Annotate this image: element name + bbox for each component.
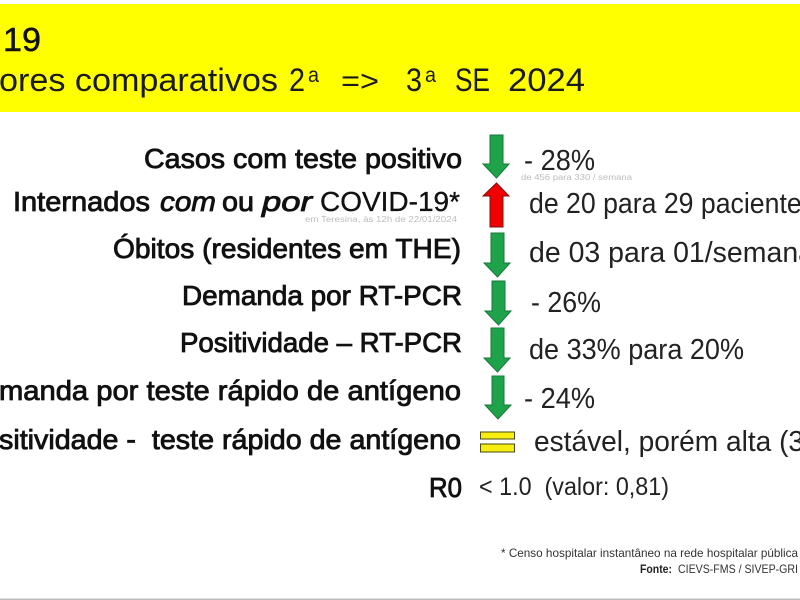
row 8: R0: R0	[429, 472, 462, 503]
row 4: demanda RT-PCR	[182, 280, 601, 325]
row 6: demanda teste rapido	[0, 375, 595, 419]
footnote: * Censo hospitalar instantâneo na rede hospitalar pública	[501, 546, 798, 560]
row 8: R0: < 1.0 (valor: 0,81)	[479, 473, 669, 501]
title: COVID-19: 19	[3, 21, 41, 58]
row 2: internados: por	[261, 186, 314, 217]
subtitle: =>	[341, 65, 379, 98]
subtitle: a	[308, 64, 319, 87]
row 5: positividade RT-PCR	[180, 327, 744, 372]
icon: yellow equals sign	[480, 432, 514, 452]
row 3: obitos	[113, 233, 800, 277]
row 6: demanda teste rapido: - 24%	[524, 383, 595, 415]
icon: green down arrow	[484, 233, 510, 277]
icon: green down arrow	[483, 135, 509, 178]
title banner	[0, 4, 800, 112]
row 8: R0	[429, 472, 669, 503]
subtitle: 2	[289, 62, 305, 98]
row 5: positividade RT-PCR: Positividade – RT-PCR	[180, 327, 462, 358]
row 2: internados: COVID-19*	[320, 186, 460, 217]
row 2: internados	[13, 183, 800, 227]
subtitle: SE	[455, 62, 490, 98]
row 7: positividade teste rapido: sitividade - teste rápido de antígeno	[0, 424, 461, 455]
row 1: casos com teste positivo: - 28%	[524, 145, 595, 177]
source: Fonte:	[640, 564, 672, 576]
row 1: casos com teste positivo: Casos com teste positivo	[144, 143, 462, 174]
icon: red up arrow	[483, 183, 509, 227]
row 3: obitos: Óbitos (residentes em THE)	[113, 233, 461, 264]
icon: green down arrow	[484, 328, 510, 372]
subtitle	[0, 62, 585, 98]
row 2: internados: ou	[222, 186, 254, 217]
icon: green down arrow	[485, 376, 511, 419]
row 4: demanda RT-PCR: - 26%	[531, 287, 601, 319]
row 2: internados: em Teresina, às 12h de 22/01/2024	[305, 215, 458, 224]
icon: green down arrow	[485, 281, 511, 325]
row 1: casos com teste positivo: de 456 para 330 / semana	[521, 173, 633, 182]
subtitle: 3	[406, 62, 422, 98]
row 5: positividade RT-PCR: de 33% para 20%	[529, 334, 744, 366]
row 7: positividade teste rapido	[0, 424, 800, 458]
footnote	[501, 546, 798, 576]
subtitle: 2024	[508, 62, 585, 98]
row 1: casos com teste positivo	[144, 135, 633, 182]
row 6: demanda teste rapido: manda por teste rápido de antígeno	[0, 375, 461, 406]
row 2: internados: com	[160, 186, 216, 217]
row 2: internados: Internados	[13, 186, 150, 217]
subtitle: ores comparativos	[0, 62, 278, 98]
row 4: demanda RT-PCR: Demanda por RT-PCR	[182, 280, 462, 311]
subtitle: a	[425, 64, 436, 87]
